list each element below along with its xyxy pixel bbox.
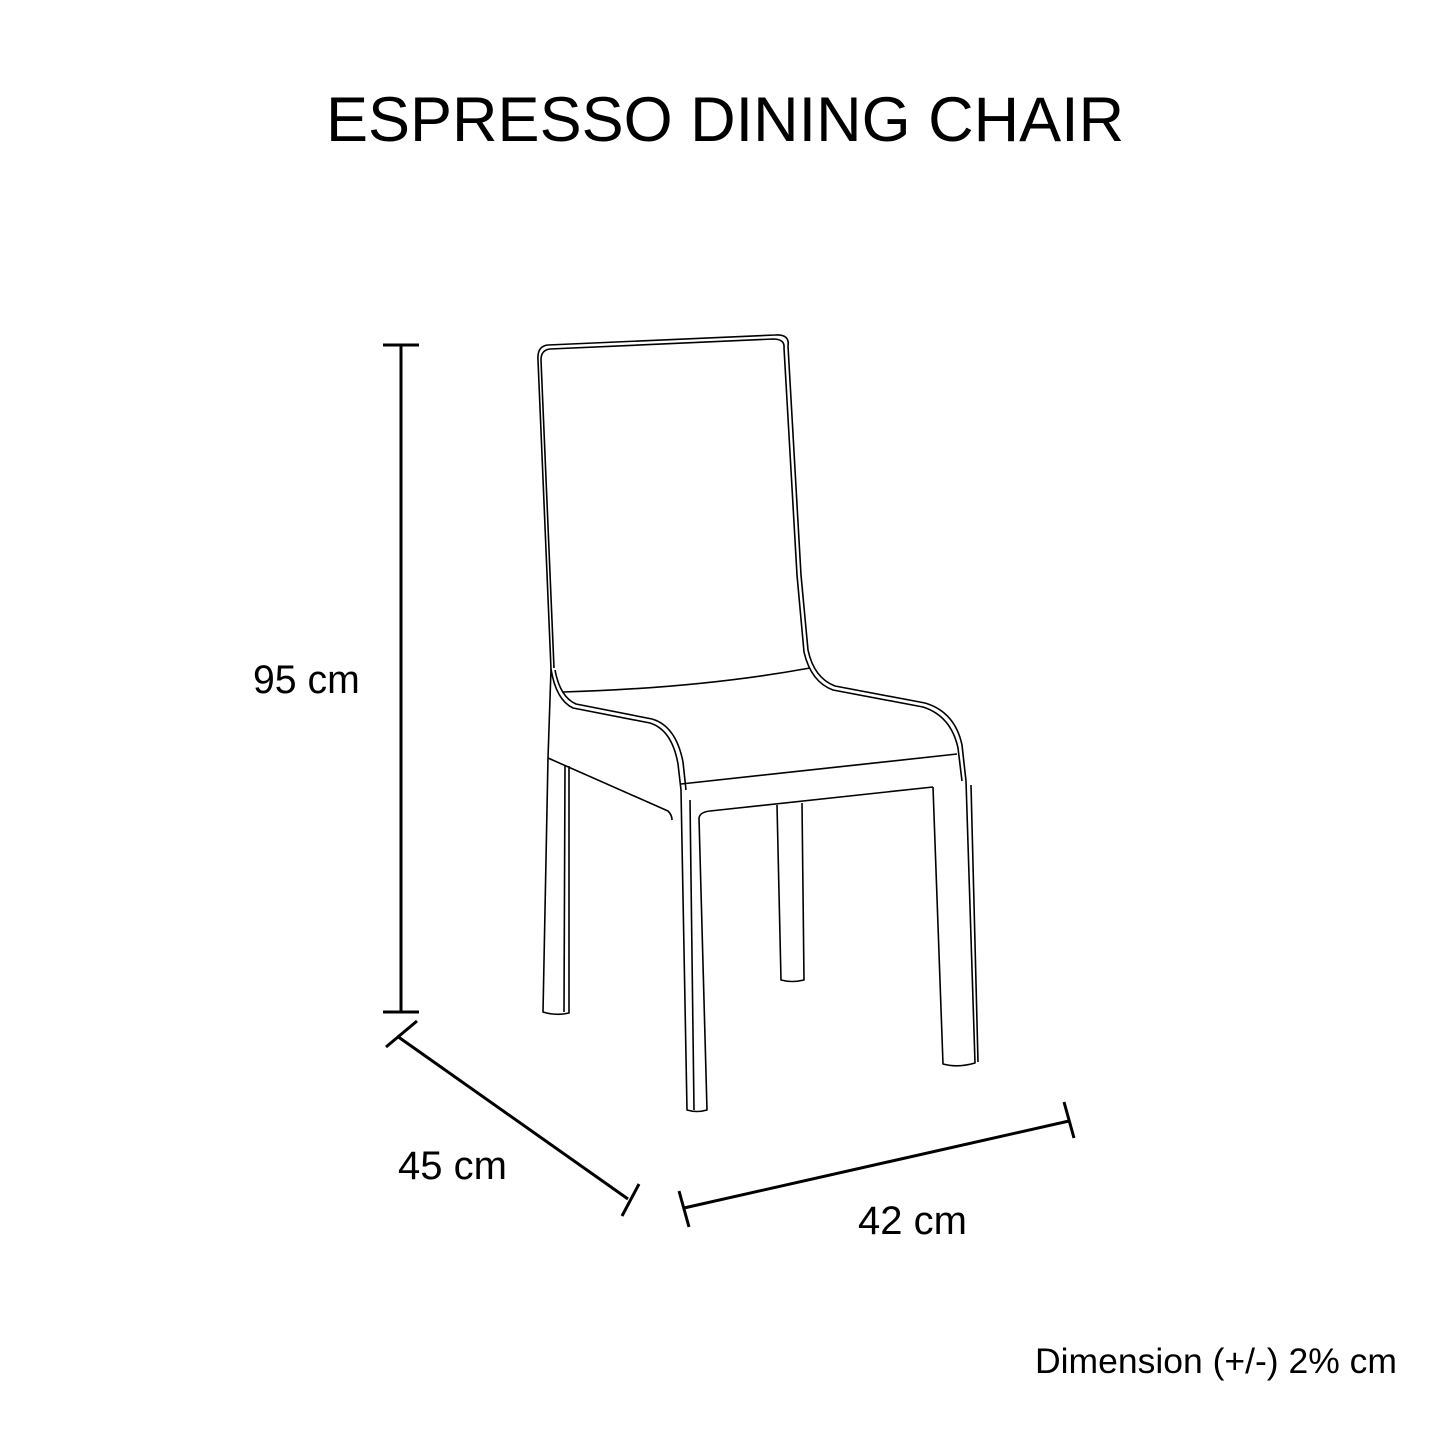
seat front edge [681, 754, 957, 784]
label: depth: 45 cm [398, 1144, 507, 1188]
dimension: depth [386, 1021, 639, 1216]
rear-right leg [777, 803, 804, 982]
seat back line [563, 668, 810, 692]
backrest outline [538, 335, 966, 781]
front-right leg [933, 781, 975, 1066]
label: width: 42 cm [858, 1199, 967, 1243]
dimension: height [383, 345, 419, 1012]
front-left leg [681, 790, 707, 1112]
label: height: 95 cm [253, 658, 360, 702]
left side [548, 669, 672, 820]
footnote: Dimension (+/-) 2% cm [1035, 1341, 1397, 1381]
dimension: width [679, 1102, 1074, 1227]
title: ESPRESSO DINING CHAIR [326, 85, 1124, 155]
chair [538, 335, 978, 1111]
back-left leg [543, 758, 569, 1014]
left arm [551, 669, 681, 790]
apron bottom [699, 787, 933, 818]
